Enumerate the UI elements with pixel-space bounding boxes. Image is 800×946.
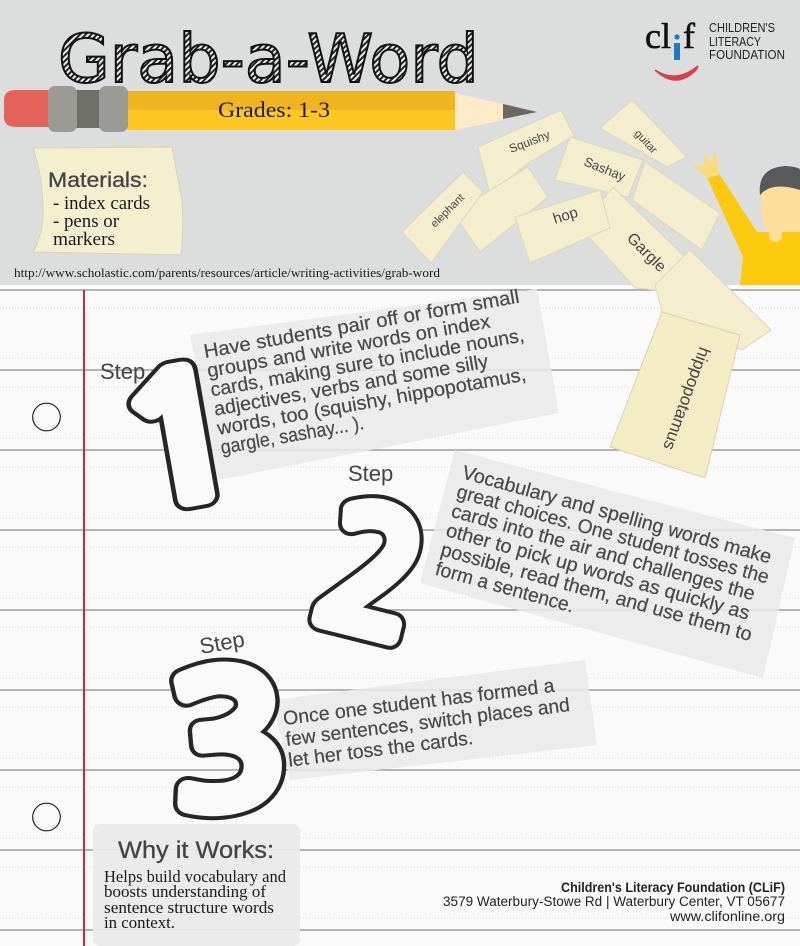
card: lower blank: [655, 250, 771, 350]
step 3 text: few sentences, switch places and: [284, 694, 571, 751]
step 3 numeral: 3: [161, 651, 296, 838]
panel: step 3: [161, 626, 597, 838]
step 2 text: [433, 462, 777, 665]
word cards pile: [402, 100, 720, 290]
footer address: [443, 880, 785, 924]
materials note: [33, 147, 183, 255]
why text: sentence structure words: [104, 898, 274, 917]
card: blank left: [453, 167, 548, 252]
why heading: Why it Works:: [118, 837, 274, 864]
why text: Helps build vocabulary and: [104, 867, 287, 886]
materials list: - pens or: [53, 211, 120, 232]
step 2 label: Step: [348, 461, 393, 486]
footer address: Children's Literacy Foundation (CLiF): [561, 880, 785, 895]
why box: [93, 824, 300, 946]
step 3 label: Step: [198, 626, 246, 659]
materials list: - index cards: [53, 193, 150, 214]
card: squishy: Squishy: [507, 127, 552, 156]
footer address: www.clifonline.org: [669, 909, 785, 924]
logo: CLiF: [645, 16, 785, 80]
step 2 text: possible, read them, and use them to: [438, 539, 755, 646]
step 2 text: great choices. One student tosses the: [454, 481, 771, 588]
logo letter i: [674, 34, 680, 60]
step 2 text: form a sentence.: [433, 558, 577, 617]
panel: step 2: [303, 450, 795, 678]
step 3 text: [282, 673, 574, 772]
step 1 label: Step: [100, 359, 145, 384]
step 2 text: cards into the air and challenges the: [449, 500, 757, 605]
logo name: CHILDREN'S: [709, 21, 775, 35]
panel: step 1: [100, 286, 559, 536]
step 3 text: Once one student has formed a: [282, 675, 556, 730]
step 1 numeral: 1: [106, 347, 258, 536]
step 1 text: Have students pair off or form small: [202, 286, 521, 363]
icon: binder hole top: [33, 403, 60, 431]
person hair: [760, 166, 800, 195]
step 1 numeral: 1: [106, 347, 258, 536]
step 3 text: let her toss the cards.: [287, 727, 474, 772]
grades label: Grades: 1-3: [218, 97, 330, 122]
step 2 numeral: 2: [303, 483, 440, 666]
why text: boosts understanding of: [104, 882, 267, 901]
card: squishy: [478, 110, 574, 195]
logo wordmark: c: [645, 16, 661, 56]
card: hippopotamus: hippopotamus: [659, 345, 714, 453]
step 2 text: other to pick up words as quickly as: [444, 519, 752, 625]
logo wordmark: [645, 16, 695, 56]
pencil illustration: [4, 86, 537, 132]
person hand: [690, 150, 719, 178]
why text: [104, 867, 287, 932]
footer address: 3579 Waterbury-Stowe Rd | Waterbury Center, VT 05677: [443, 894, 785, 909]
step 1 text: groups and write words on index: [205, 311, 492, 382]
step 1 text box: [190, 289, 559, 480]
why text: in context.: [104, 913, 175, 932]
step 1 text: words, too (squishy, hippopotamus,: [215, 364, 528, 440]
card: hop: hop: [551, 204, 580, 228]
step 1 text: gargle, sashay... ).: [219, 412, 366, 459]
logo name: LITERACY: [709, 35, 762, 49]
step 1 text: adjectives, verbs and some silly: [212, 351, 490, 421]
step 3 numeral: 3: [161, 651, 296, 838]
panel: why it works: [93, 824, 300, 946]
step 1 text: [201, 286, 538, 459]
logo smile: [655, 66, 698, 80]
materials heading: Materials:: [48, 168, 148, 192]
source url: http://www.scholastic.com/parents/resources/article/writing-activities/grab-word: [14, 266, 440, 280]
note paper: [33, 147, 183, 255]
step 1 text: cards, making sure to include nouns,: [209, 324, 526, 401]
card: guitar: guitar: [632, 128, 660, 156]
materials list: [53, 193, 150, 250]
title: Grab-a-Word: [58, 20, 479, 98]
header band: [0, 0, 800, 285]
card: elephant: [402, 172, 483, 263]
person body and arm: [707, 172, 800, 285]
logo name: FOUNDATION: [709, 48, 785, 62]
logo name: [709, 21, 785, 62]
card: gargle: [570, 187, 690, 290]
card: sashay: [555, 137, 643, 197]
person neck and face: [761, 186, 800, 242]
card: sashay: Sashay: [582, 154, 628, 184]
card: hop: [515, 190, 610, 263]
person waving: [690, 150, 800, 285]
step 2 text: Vocabulary and spelling words make: [460, 462, 774, 568]
card: elephant: elephant: [429, 192, 467, 230]
card: hippopotamus: [610, 312, 740, 478]
logo wordmark: l: [661, 16, 671, 56]
card: gargle: Gargle: [623, 230, 669, 276]
step 3 text box: [273, 660, 597, 780]
card: guitar: [600, 100, 687, 167]
card: blank right: [632, 162, 720, 250]
materials list: markers: [53, 229, 115, 250]
step 2 text box: [420, 450, 795, 678]
icon: binder hole bottom: [33, 803, 60, 831]
logo wordmark: f: [683, 16, 695, 56]
step 2 numeral: 2: [303, 483, 440, 666]
